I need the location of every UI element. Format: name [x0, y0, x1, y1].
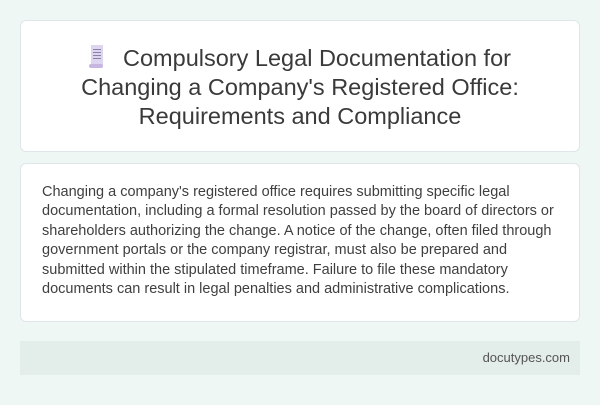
text block: description: [42, 184, 554, 297]
text block: description: Changing a company's registered office requires submitting specific legal: [42, 184, 510, 200]
text block: description: government portals or the company registrar, must also be prepared and: [42, 242, 507, 258]
text block: description: shareholders authorizing the change. A notice of the change, often filed through: [42, 223, 551, 239]
panel: description card: [20, 163, 580, 322]
text block: description: documents can result in legal penalties and administrative complications.: [42, 281, 509, 297]
title: Compulsory Legal Documentation for: [123, 45, 511, 71]
panel: title card: [20, 20, 580, 152]
text block: description: submitted within the stipulated timeframe. Failure to file these mandatory: [42, 262, 508, 278]
footer bar: [20, 341, 580, 375]
footer text: docutypes.com: [483, 350, 570, 365]
text block: description: documentation, including a formal resolution passed by the board of directors or: [42, 203, 554, 219]
title: [81, 45, 519, 129]
icon: document scroll: [89, 45, 103, 68]
title: Changing a Company's Registered Office:: [81, 74, 519, 100]
title: Requirements and Compliance: [139, 103, 461, 129]
